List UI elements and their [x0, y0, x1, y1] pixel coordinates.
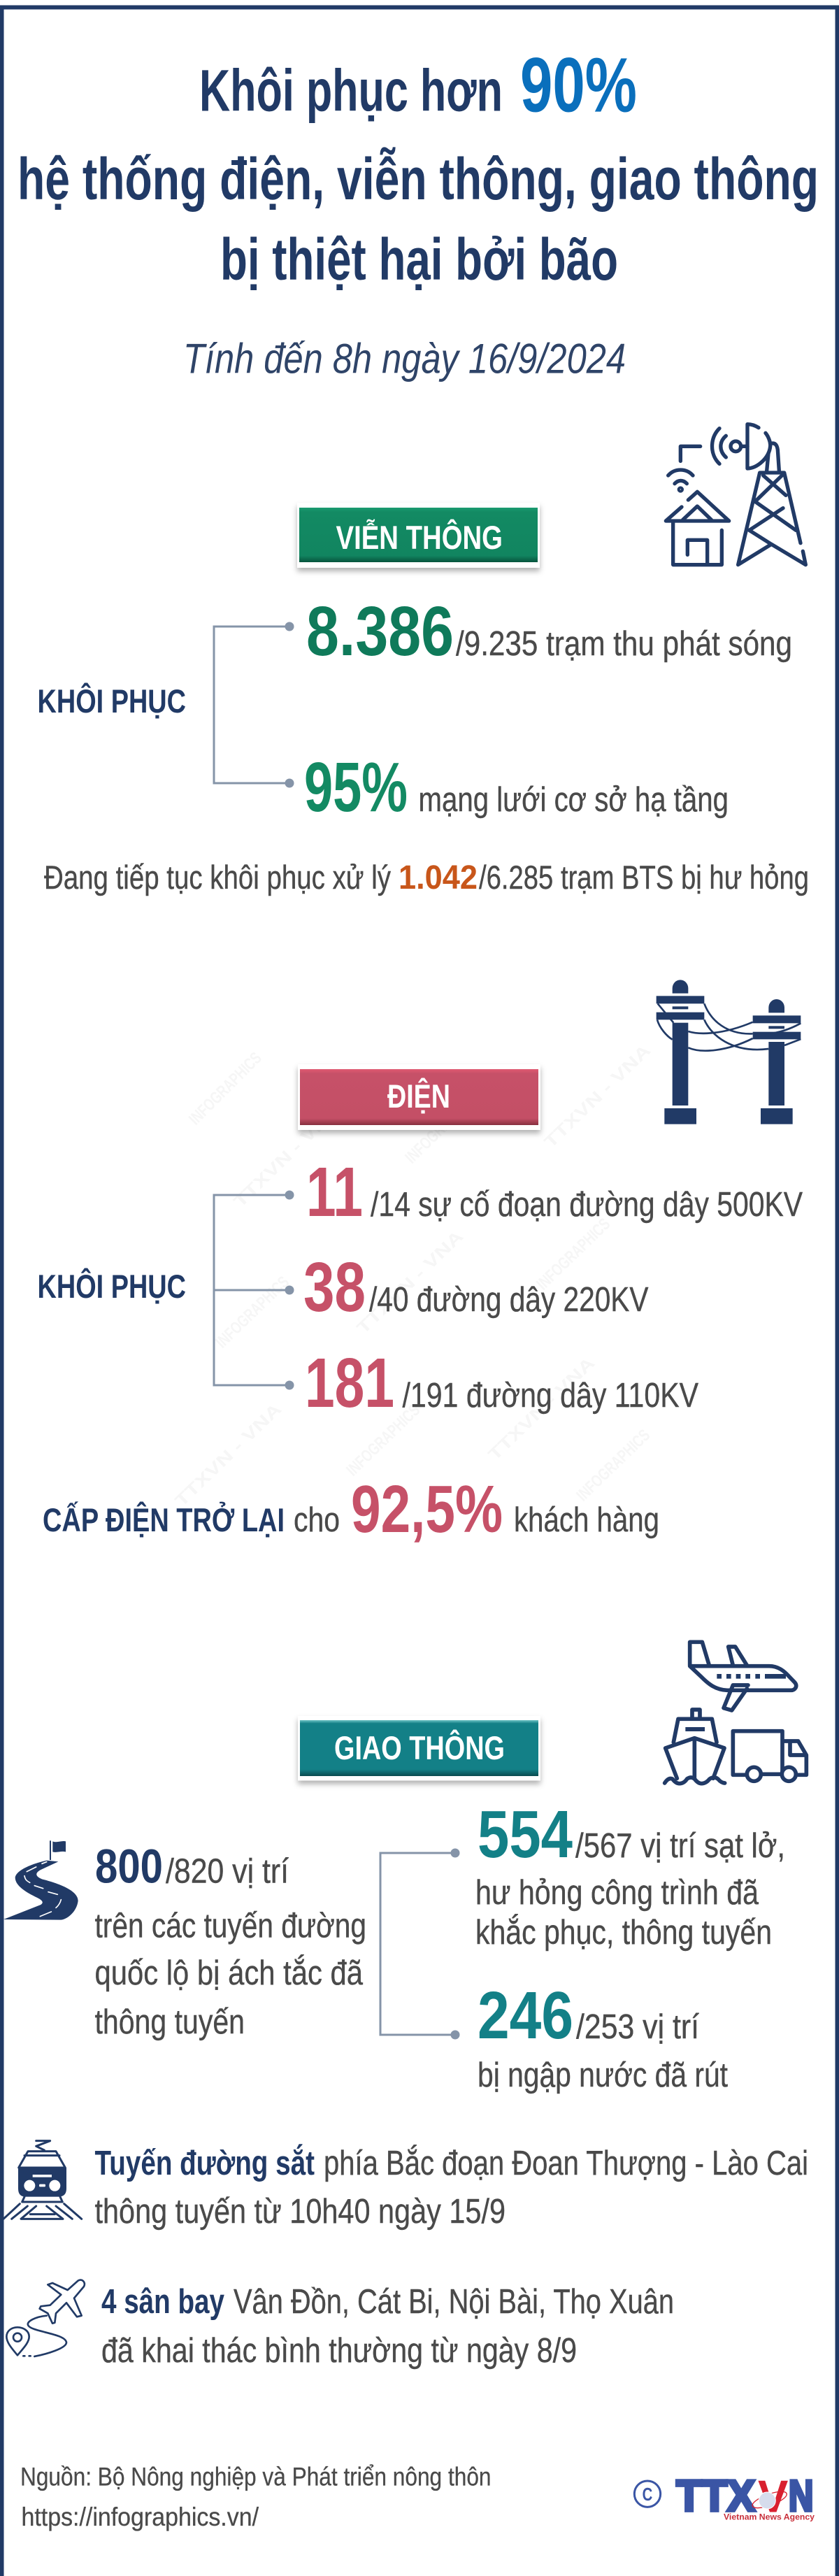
logo: TTXVN	[634, 2470, 815, 2522]
note: BTS	[44, 859, 809, 896]
stat: 11: 11	[306, 1153, 363, 1231]
section banner: giao thông	[298, 1716, 540, 1780]
source	[20, 2463, 491, 2531]
section banner: điện: ĐIỆN	[387, 1078, 450, 1115]
stat: 8.386: /9.235 trạm thu phát sóng	[456, 625, 792, 663]
panel: viễn thông	[38, 592, 809, 896]
stat: 800: trên các tuyến đường	[95, 1908, 366, 1945]
stat: 554: khắc phục, thông tuyến	[475, 1914, 772, 1952]
text: railway: Tuyến đường sắt	[95, 2144, 315, 2182]
logo: TTXVN: Vietnam News Agency	[724, 2512, 815, 2522]
source: Nguồn: Bộ Nông nghiệp và Phát triển nông thôn	[20, 2463, 491, 2491]
stat: 554: /567 vị trí sạt lở,	[575, 1827, 785, 1865]
icon: road with flag	[3, 1840, 78, 1920]
stat: 800: thông tuyến	[95, 2003, 245, 2041]
stat: 181	[305, 1344, 698, 1422]
watermarks: INFOGRAPHICS	[212, 1273, 293, 1352]
watermarks: TTXVN - VNA	[230, 1101, 344, 1211]
section banner: giao thông: GIAO THÔNG	[334, 1729, 505, 1766]
title: Khôi phục hơn	[199, 57, 503, 123]
section banner: viễn thông: VIỄN THÔNG	[336, 519, 503, 556]
source: https://infographics.vn/	[21, 2503, 259, 2531]
subtitle: Tính đến 8h ngày 16/9/2024	[183, 336, 626, 382]
icon: train	[3, 2141, 82, 2219]
stat: 92,5%: CẤP ĐIỆN TRỞ LẠI	[43, 1501, 285, 1538]
stat: 8.386	[306, 592, 792, 671]
stat: 800	[95, 1839, 366, 2041]
stat: 92,5%: khách hàng	[514, 1501, 659, 1539]
stat: 11	[306, 1153, 803, 1231]
stat: 92,5%	[43, 1472, 659, 1547]
bracket connector	[214, 622, 294, 787]
watermarks: TTXVN - VNA	[540, 1041, 654, 1152]
stat: 554: hư hỏng công trình đã	[475, 1874, 759, 1912]
stat: 95%: 95%	[304, 748, 408, 827]
stat: 38	[303, 1248, 649, 1326]
stat: 92,5%: 92,5%	[351, 1472, 503, 1547]
watermarks: INFOGRAPHICS	[533, 1215, 614, 1294]
text: railway	[95, 2144, 808, 2231]
watermarks	[171, 1041, 654, 1510]
stat: 92,5%: cho	[294, 1501, 340, 1539]
section banner: điện	[298, 1064, 540, 1130]
stat: 38: /40 đường dây 220KV	[369, 1281, 649, 1319]
text: airports: 4 sân bay	[101, 2283, 224, 2321]
watermarks: TTXVN - VNA	[353, 1227, 467, 1338]
panel: giao thông	[3, 1797, 808, 2370]
stat: 181: /191 đường dây 110KV	[403, 1377, 698, 1415]
text: railway: thông tuyến từ 10h40 ngày 15/9	[95, 2193, 505, 2231]
title	[17, 42, 819, 292]
panel: điện	[38, 1153, 803, 1547]
label: khôi phục: KHÔI PHỤC	[38, 1268, 186, 1305]
stat: 800: /820 vị trí	[166, 1853, 289, 1891]
stat: 554: 554	[478, 1797, 573, 1872]
icon: airplane route with pin	[6, 2280, 85, 2356]
bracket connector	[214, 1190, 294, 1390]
bracket connector	[380, 1849, 460, 2039]
watermarks: TTXVN - VNA	[485, 1354, 598, 1464]
logo: TTXVN: N	[789, 2472, 813, 2520]
icon: plane, ship and truck	[665, 1642, 806, 1784]
stat: 246: 246	[478, 1978, 573, 2053]
note: BTS: Đang tiếp tục khôi phục xử lý	[44, 859, 391, 896]
stat: 800: quốc lộ bị ách tắc đã	[95, 1954, 364, 1992]
stat: 554	[475, 1797, 785, 1952]
watermarks: INFOGRAPHICS	[343, 1401, 424, 1480]
text: airports: đã khai thác bình thường từ ngày 8/9	[101, 2332, 577, 2370]
stat: 38: 38	[303, 1248, 366, 1326]
stat: 95%	[304, 748, 729, 827]
icon: house and telecom tower	[666, 424, 805, 565]
watermarks: INFOGRAPHICS	[573, 1426, 654, 1505]
logo: TTXVN: V	[758, 2470, 789, 2521]
label: khôi phục: KHÔI PHỤC	[38, 682, 186, 720]
stat: 8.386: 8.386	[306, 592, 454, 671]
stat: 181: 181	[305, 1344, 394, 1422]
stat: 800: 800	[95, 1839, 163, 1894]
section banner: viễn thông	[297, 503, 540, 568]
stat: 246	[478, 1978, 728, 2094]
title: 90%	[520, 42, 637, 129]
text: airports	[101, 2283, 674, 2370]
stat: 246: bị ngập nước đã rút	[478, 2056, 728, 2094]
watermarks: INFOGRAPHICS	[401, 1088, 482, 1167]
title: bị thiệt hại bởi bão	[220, 227, 618, 292]
icon: power poles	[657, 980, 801, 1124]
stat: 246: /253 vị trí	[576, 2008, 699, 2046]
stat: 95%: mạng lưới cơ sở hạ tầng	[418, 781, 729, 819]
note: BTS: 1.042	[399, 859, 478, 896]
watermarks: INFOGRAPHICS	[185, 1049, 266, 1129]
text: airports: Vân Đồn, Cát Bi, Nội Bài, Thọ Xuân	[234, 2283, 674, 2321]
watermarks: TTXVN - VNA	[171, 1400, 285, 1510]
logo: TTXVN: TTX	[676, 2472, 755, 2520]
logo: TTXVN: C	[643, 2484, 653, 2505]
